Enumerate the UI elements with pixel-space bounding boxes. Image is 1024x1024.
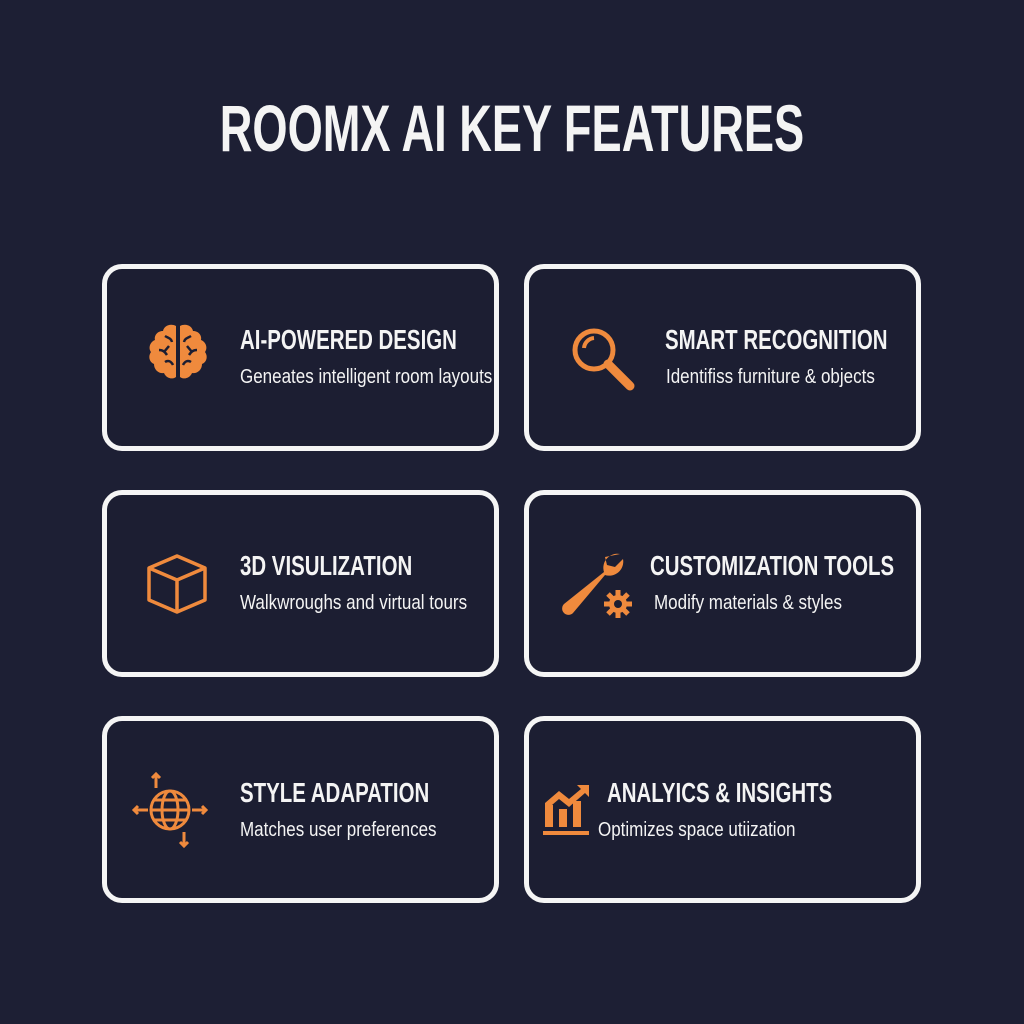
panel: analytics [524,716,921,903]
heading: analytics: ANALYICS & INSIGHTS [607,777,832,808]
text: style: Matches user preferences [240,819,437,841]
icon: globe with arrows [132,772,208,848]
text: customization: Modify materials & styles [654,592,842,614]
panel: customization tools [524,490,921,677]
text: analytics: Optimizes space utiization [598,819,795,841]
heading: ai-powered design: AI-POWERED DESIGN [240,324,457,355]
icon: wrench and gear [562,554,632,618]
icon: magnifier [572,328,634,390]
panel: 3d visualization [102,490,499,677]
title: ROOMX AI KEY FEATURES [220,91,804,165]
panel: ai-powered design [102,264,499,451]
icon: chart [543,785,589,835]
heading: 3d visualization: 3D VISULIZATION [240,550,412,581]
panel: style adaptation [102,716,499,903]
heading: style adaptation: STYLE ADAPATION [240,777,429,808]
text: smart recognition: Identifiss furniture & objects [666,366,875,388]
icon: cube [147,554,207,614]
heading: smart recognition: SMART RECOGNITION [665,324,888,355]
text: 3d: Walkwroughs and virtual tours [240,592,467,614]
icon: brain [149,324,207,378]
text: ai-powered: Geneates intelligent room layouts [240,366,492,388]
panel: smart recognition [524,264,921,451]
heading: customization tools: CUSTOMIZATION TOOLS [650,550,894,581]
